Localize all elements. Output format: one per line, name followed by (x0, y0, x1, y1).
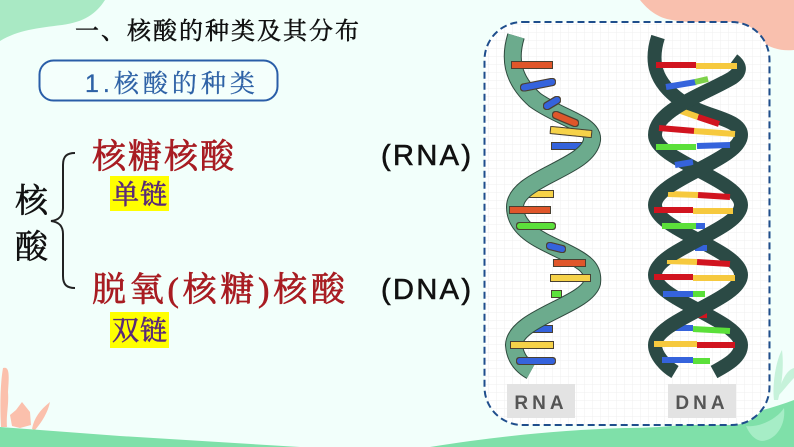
RNA caption: RNA (514, 393, 568, 414)
title: 一、核酸的种类及其分布 (75, 18, 361, 45)
decoration: top-right pink blob (640, 0, 794, 50)
RNA helix (510, 36, 592, 371)
tag: 双链: 双链 (112, 316, 168, 346)
item: 脱氧(核糖)核酸: 脱氧(核糖)核酸 (92, 271, 346, 309)
decoration: pale leaf over band (746, 408, 784, 441)
decoration: bottom-left green band (0, 427, 300, 447)
panel: helix diagrams (484, 22, 770, 425)
decoration: bottom-right green band (430, 400, 794, 447)
label: 核酸 vertical: 酸 (15, 229, 49, 266)
DNA caption (668, 384, 736, 418)
tag: 单链: 单链 (112, 180, 168, 210)
label: 核酸 vertical (15, 183, 49, 266)
decoration: bottom-left pink leaves (0, 368, 50, 430)
brace (51, 153, 75, 288)
DNA helix (654, 37, 741, 372)
subtitle pill (40, 60, 278, 100)
subtitle text: 1.核酸的种类 (85, 70, 259, 98)
DNA front crossings (652, 76, 744, 332)
item: RNA label: (RNA) (381, 140, 471, 172)
decoration: top-left green blob (0, 0, 105, 41)
RNA caption (507, 384, 575, 418)
label: 核酸 vertical: 核 (15, 183, 49, 220)
item: 核糖核酸: 核糖核酸 (92, 138, 236, 176)
item: DNA label: (DNA) (381, 274, 471, 306)
DNA caption: DNA (675, 393, 729, 414)
decoration: bottom-right pale leaf (773, 350, 794, 400)
